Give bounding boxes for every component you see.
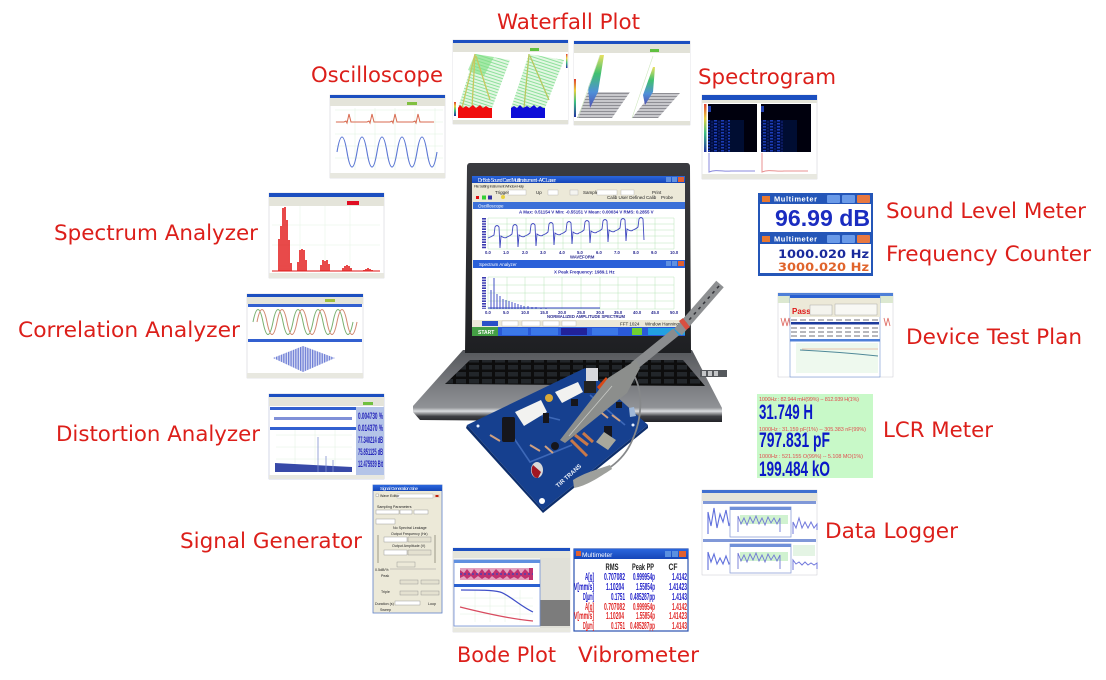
label: Spectrogram: Spectrogram: [698, 65, 836, 89]
laptop screen: main application: Dr Bob Sound Card MultiInstrument - A/C Laser: [478, 178, 556, 184]
screenshot: vibrometer: 1.4143: [672, 621, 687, 632]
scope window: 0.0: [485, 250, 491, 255]
scope window: [473, 202, 685, 260]
scope window: A Max: 0.51154 V Min: -0.55151 V Mean: 0.00034 V RMS: 0.2855 V: [519, 210, 654, 214]
label: Frequency Counter: Frequency Counter: [886, 242, 1091, 266]
screenshot: signal generator: Loop: [428, 602, 436, 606]
label: Spectrum Analyzer: Spectrum Analyzer: [54, 221, 258, 245]
screenshot: signal generator: Peak: [381, 574, 389, 578]
screenshot: spectrum analyzer: [269, 193, 384, 278]
vibrometer red rows: 1.41423: [669, 611, 687, 622]
screenshot: correlation analyzer: [247, 294, 363, 378]
vibrometer red rows: 1.10204: [606, 611, 624, 622]
vibrometer red rows: 0.707082: [604, 602, 625, 613]
spectrum window: 0.0: [485, 310, 491, 315]
vibrometer header: Peak PP: [632, 562, 654, 572]
vibrometer red rows: 0.485287pp: [630, 621, 655, 632]
vibrometer red rows: 1.55854p: [636, 611, 655, 622]
taskbar: START: [478, 330, 494, 336]
vibrometer red rows: A[g]: [585, 602, 594, 613]
screenshot: signal generator: No Spectral Leakage: [393, 526, 427, 530]
vibrometer red rows: D[µm]: [583, 621, 594, 632]
frequency reading 2: 3000.020 Hz: [778, 260, 869, 274]
oscilloscope probe and clip: [560, 284, 720, 488]
scope window: 9.0: [651, 250, 657, 255]
LCR meter readout: 1000Hz : 521.155 O(99%) -- 5.108 MO(1%): [759, 454, 863, 460]
title label: Waterfall Plot: Waterfall Plot: [497, 10, 640, 34]
screenshot: signal generator: Sampling Parameters: [377, 505, 412, 509]
scope window: 3.0: [540, 250, 546, 255]
laptop screen: main application: Sample: [583, 190, 599, 195]
spectrum window: [473, 260, 685, 320]
vibrometer blue rows: 1.55854p: [636, 582, 655, 593]
scope window: 2.0: [522, 250, 528, 255]
spectrum window: 40.0: [633, 310, 642, 315]
vibrometer blue rows: 1.10204: [606, 582, 624, 593]
spectrum window: NORMALIZED AMPLITUDE SPECTRUM: [547, 314, 626, 319]
laptop screen: main application: File Setting Instrument Window Help: [474, 184, 525, 188]
LCR meter readout: [757, 394, 873, 481]
distortion readouts: 0.004730 %: [358, 411, 383, 421]
vibrometer red rows: 0.999954p: [633, 602, 655, 613]
label: Correlation Analyzer: Correlation Analyzer: [18, 318, 240, 342]
screenshot: vibrometer: Multimeter: [582, 552, 613, 559]
screenshot: vibrometer: 1.4143: [672, 592, 687, 603]
spectrum window: X Peak Frequency: 1989.1 Hz: [554, 270, 615, 274]
laptop screen: main application: Trigger: [495, 190, 510, 195]
vibrometer blue rows: 0.485287pp: [630, 592, 655, 603]
scope window: 5.0: [577, 250, 583, 255]
scope window: 6.0: [596, 250, 602, 255]
vibrometer red rows: [574, 602, 687, 632]
taskbar: [472, 327, 685, 336]
screenshot: bode plot: [453, 548, 570, 632]
vibrometer blue rows: V[mm/s]: [574, 582, 594, 593]
screenshot: signal generator: 0.5dB/%: [375, 568, 389, 572]
spectrum window: 25.0: [577, 310, 586, 315]
laptop screen: main application: Up: [536, 190, 542, 195]
screenshot: signal generator: Duration (s): [375, 602, 394, 606]
label: Data Logger: Data Logger: [825, 519, 958, 543]
bottom toolbar: [473, 320, 685, 327]
laptop screen: main application: Probe: [661, 195, 674, 200]
scope window: 4.0: [559, 250, 565, 255]
screenshot: signal generator: [373, 485, 442, 613]
scope window: 1.0: [503, 250, 509, 255]
label: LCR Meter: LCR Meter: [883, 418, 993, 442]
LCR meter readout: 797.831 pF: [759, 429, 830, 452]
scope window: WAVEFORM: [570, 254, 595, 260]
bottom toolbar: Window Hanning: [645, 322, 680, 326]
scope window: 8.0: [633, 250, 639, 255]
spectrum window: 30.0: [596, 310, 605, 315]
LCR meter readout: 1000Hz : 82.944 mH(99%) -- 812.939 H(1%): [759, 397, 859, 403]
text: 75.851125 dB: [358, 447, 383, 457]
screenshot: oscilloscope: [330, 95, 445, 178]
laptop: [413, 163, 727, 422]
spectrum window: 15.0: [540, 310, 549, 315]
text: 77.340214 dB: [358, 435, 383, 445]
spectrum window: 5.0: [503, 310, 509, 315]
PCB circuit board: TIR TRANS: [555, 464, 583, 489]
screenshot: signal generator: Sweep: [380, 608, 391, 612]
bottom toolbar: FFT 1024: [620, 322, 640, 326]
components: [502, 417, 515, 442]
vibrometer header: [606, 562, 678, 572]
laptop base: [413, 350, 722, 422]
label: Sound Level Meter: Sound Level Meter: [886, 199, 1086, 223]
LCR meter readout: 1000Hz : 31.159 pF(1%) -- 305.383 nF(99%): [759, 427, 866, 433]
vibrometer red rows: V[mm/s]: [574, 611, 594, 622]
screenshot: vibrometer: [574, 549, 688, 632]
vibrometer header: RMS: [606, 562, 618, 572]
vibrometer blue rows: 0.707082: [604, 572, 625, 583]
LCR meter readout: 199.484 kO: [759, 458, 830, 481]
screenshot: device test plan: [778, 293, 893, 377]
spectrum window: 20.0: [558, 310, 567, 315]
scope window: Oscilloscope: [478, 204, 504, 208]
spectrum window: 10.0: [521, 310, 530, 315]
vibrometer blue rows: A[g]: [585, 572, 594, 583]
frequency reading 1: 1000.020 Hz: [778, 247, 869, 261]
vibrometer header: CF: [668, 562, 678, 572]
screenshot: spectrogram: [702, 95, 817, 179]
vibrometer red rows: 0.1751: [611, 621, 625, 632]
vibrometer blue rows: 0.999954p: [633, 572, 655, 583]
PCB circuit board: [466, 368, 648, 513]
cable stub: [700, 370, 727, 377]
label: Vibrometer: Vibrometer: [578, 643, 699, 667]
screenshot: signal generator: Triple: [381, 590, 390, 594]
relays: [515, 400, 547, 426]
vibrometer blue rows: D[µm]: [583, 592, 594, 603]
label: Bode Plot: Bode Plot: [457, 643, 556, 667]
vibrometer blue rows: 0.1751: [611, 592, 625, 603]
LCR meter readout: 31.749 H: [759, 401, 813, 424]
screenshot: signal generator: Wave Editor: [380, 494, 400, 498]
laptop screen: main application: Calib User Defined Calib: [607, 195, 657, 200]
vibrometer blue rows: [574, 572, 687, 603]
label: Signal Generator: Signal Generator: [180, 529, 362, 553]
multimeter: sound level and frequency: Multimeter: [774, 234, 817, 244]
text: 12.475939 Bit: [358, 459, 383, 469]
screenshot: data logger: [702, 490, 817, 575]
screenshot: vibrometer: 1.4142: [672, 572, 687, 583]
screenshot: signal generator: Signal Generation Sine: [380, 486, 418, 491]
multimeter: sound level and frequency: [758, 193, 873, 276]
screenshot: 3D spectrogram waterfall: [574, 41, 690, 125]
laptop screen: main application: Print: [652, 190, 662, 195]
screenshot: distortion analyzer: [269, 394, 384, 479]
screenshot: signal generator: Output Amplitude (V): [392, 544, 425, 548]
spectrum window: 50.0: [670, 310, 679, 315]
multimeter: sound level and frequency: Multimeter: [774, 194, 817, 204]
label: Device Test Plan: Device Test Plan: [906, 325, 1082, 349]
screenshot: signal generator: Output Frequency (Hz): [391, 532, 428, 536]
screenshot: device test plan: Pass: [792, 307, 811, 316]
laptop screen: main application: [472, 176, 685, 336]
label: Oscilloscope: Oscilloscope: [311, 63, 443, 87]
distortion readouts: 0.014370 %: [358, 423, 383, 433]
distortion readouts: [358, 411, 383, 469]
scope window: 7.0: [614, 250, 620, 255]
label: Distortion Analyzer: Distortion Analyzer: [56, 422, 260, 446]
vibrometer blue rows: 1.41423: [669, 582, 687, 593]
spectrum window: 45.0: [651, 310, 660, 315]
spectrum window: 35.0: [614, 310, 623, 315]
screenshot: vibrometer: 1.4142: [672, 602, 687, 613]
laptop bezel: [465, 163, 691, 353]
screenshot: waterfall plot: [453, 40, 568, 124]
spectrum window: Spectrum Analyzer: [479, 262, 517, 267]
scope window: 10.0: [670, 250, 679, 255]
sound level reading: 96.99 dB: [775, 205, 870, 231]
